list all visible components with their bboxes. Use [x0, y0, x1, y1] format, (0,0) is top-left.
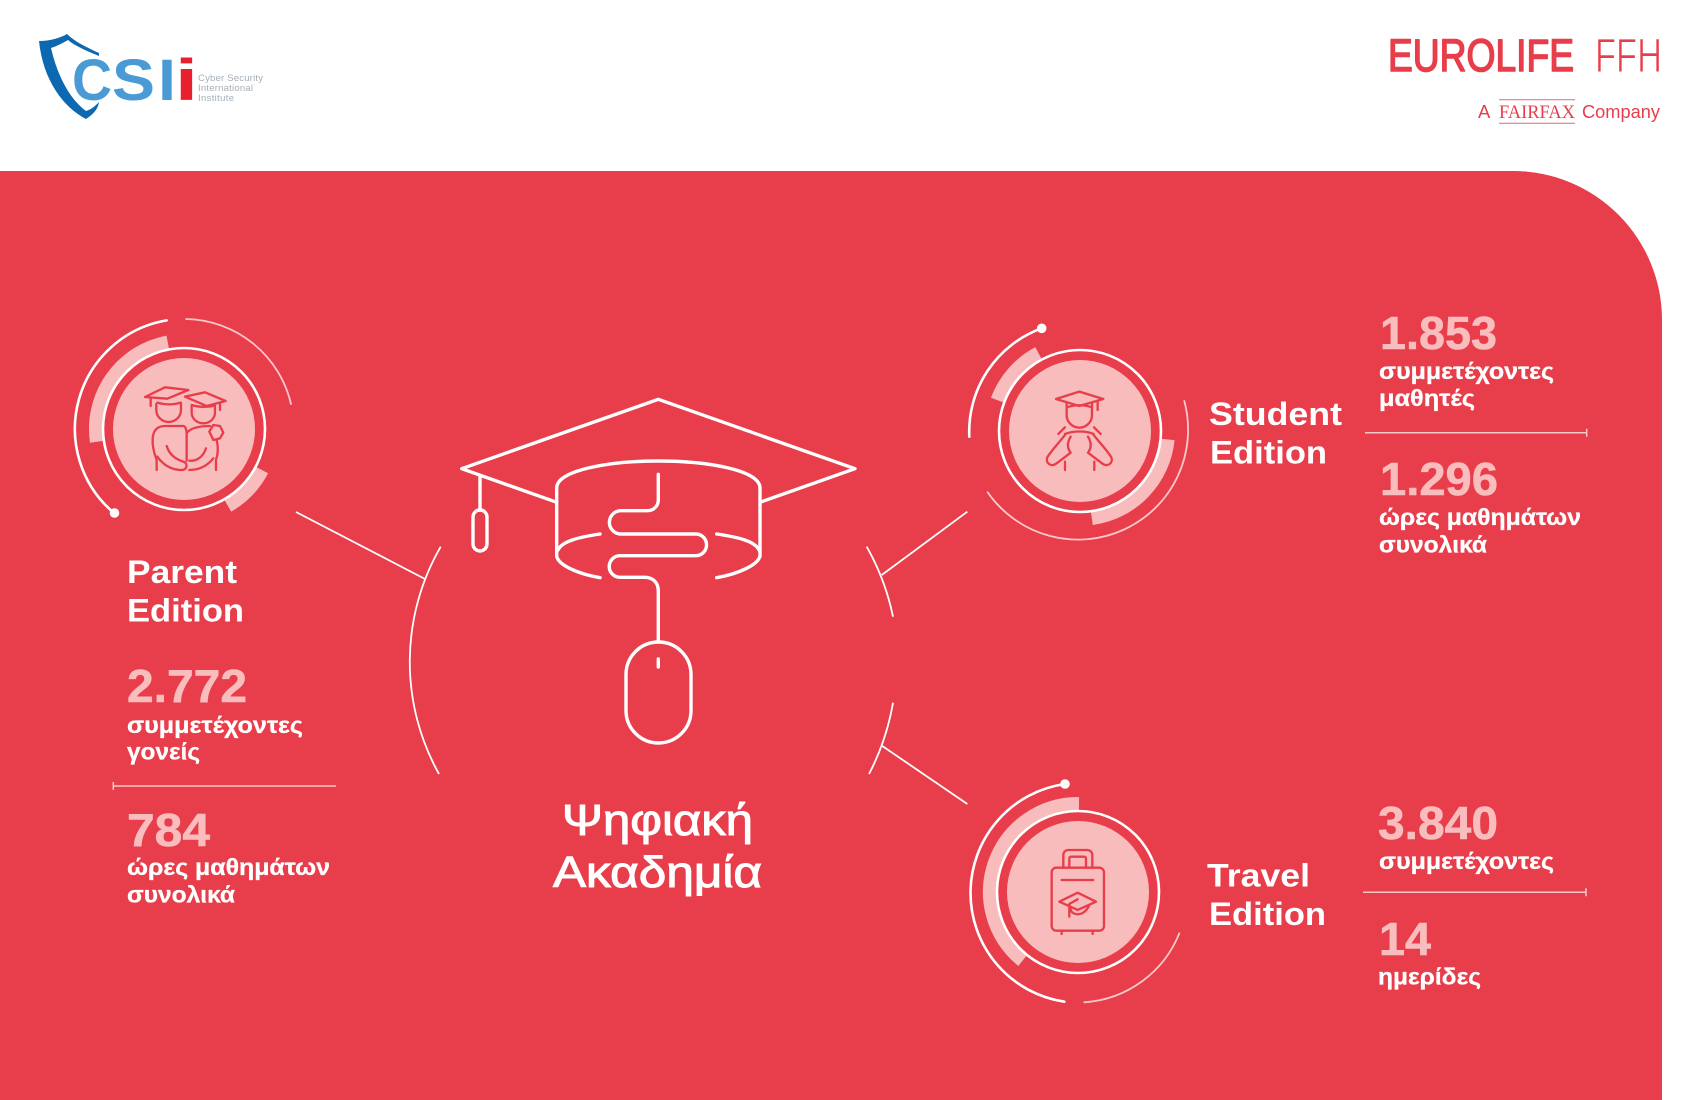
connector: student edition [882, 512, 967, 575]
logo letter i: i [175, 48, 198, 113]
stat: 1.296 hours: ώρες μαθημάτων [1379, 504, 1581, 530]
edition name: Travel Edition: Travel [1207, 858, 1310, 894]
stat: 1.296 hours: συνολικά [1379, 531, 1487, 557]
edition name: Student Edition: Student [1209, 396, 1342, 432]
stat: 2.772 parents [127, 660, 303, 764]
tagline A FAIRFAX Company: FAIRFAX [1499, 103, 1576, 123]
panel: Student Edition [969, 324, 1188, 540]
tagline A FAIRFAX Company [1478, 99, 1661, 124]
logo letters CSI: I [158, 48, 176, 113]
central circle arc right bottom [869, 703, 893, 774]
connector: parent edition [296, 512, 425, 579]
wordmark EUROLIFE: EUROLIFE [1388, 30, 1574, 81]
stat: 1.853 students: 1.853 [1380, 307, 1497, 359]
stat: 1.853 students: μαθητές [1379, 385, 1475, 411]
tassel [478, 476, 482, 510]
stat: 3.840 participants: συμμετέχοντες [1379, 848, 1554, 874]
stat: 784 hours: συνολικά [127, 882, 235, 908]
stat: 784 hours: 784 [127, 804, 210, 856]
central circle arc right top [867, 547, 893, 617]
central circle arc left [410, 547, 441, 774]
title [553, 796, 762, 897]
stat: 2.772 parents: συμμετέχοντες [127, 712, 303, 738]
edition name: Parent Edition: Parent [127, 554, 237, 590]
logo: Eurolife FFH [1388, 30, 1662, 124]
stat: 2.772 parents: 2.772 [127, 660, 247, 712]
tagline A FAIRFAX Company: Company [1582, 101, 1661, 122]
logo tagline: Institute [198, 93, 234, 104]
cap board [462, 399, 855, 502]
gauge ring [75, 319, 291, 518]
icon: parents with graduation caps [145, 387, 226, 470]
edition name: Student Edition: Edition [1210, 434, 1327, 470]
logo tagline: International [198, 83, 253, 94]
stat: 14 workshops [1378, 913, 1481, 990]
logo: CSI [39, 34, 263, 119]
stat: 3.840 participants [1378, 797, 1554, 874]
stat: 2.772 parents: γονείς [127, 738, 200, 764]
logo letters CSI: C [72, 48, 112, 113]
stat: 1.296 hours [1379, 453, 1581, 557]
title: Ακαδημία [553, 848, 762, 897]
panel: Travel Edition [971, 779, 1179, 1002]
stat: 784 hours: ώρες μαθημάτων [127, 854, 330, 880]
edition name: Parent Edition [127, 554, 244, 629]
panel: Parent Edition [75, 319, 291, 518]
icon: graduation cap with mouse [462, 399, 855, 743]
stat: 1.853 students [1379, 307, 1554, 411]
stat: 3.840 participants: 3.840 [1378, 797, 1498, 849]
cap band [557, 461, 760, 556]
edition name: Parent Edition: Edition [127, 593, 244, 629]
logo tagline [198, 73, 263, 104]
icon: shield [39, 34, 99, 119]
logo letters CSI [72, 48, 176, 113]
edition name: Student Edition [1209, 396, 1342, 470]
mouse cable [609, 474, 707, 642]
icon: suitcase with graduation cap [1052, 850, 1104, 934]
tagline A FAIRFAX Company: A [1478, 101, 1491, 122]
edition name: Travel Edition: Edition [1209, 896, 1326, 932]
stat: 1.296 hours: 1.296 [1380, 453, 1498, 505]
gauge ring [971, 779, 1179, 1002]
mouse wheel [657, 659, 660, 667]
gauge ring [969, 324, 1188, 540]
stat: 784 hours [127, 804, 330, 908]
icon: student with backpack [1047, 392, 1112, 470]
wordmark FFH: FFH [1595, 30, 1662, 83]
stat: 1.853 students: συμμετέχοντες [1379, 358, 1554, 384]
logo letters CSI: S [112, 48, 155, 113]
title: Ψηφιακή [562, 796, 753, 845]
stat: 14 workshops: 14 [1379, 913, 1431, 965]
stat: 14 workshops: ημερίδες [1378, 964, 1481, 990]
mouse body [626, 642, 691, 743]
logo tagline: Cyber Security [198, 73, 263, 84]
edition name: Travel Edition [1207, 858, 1326, 932]
connector: travel edition [882, 746, 967, 804]
